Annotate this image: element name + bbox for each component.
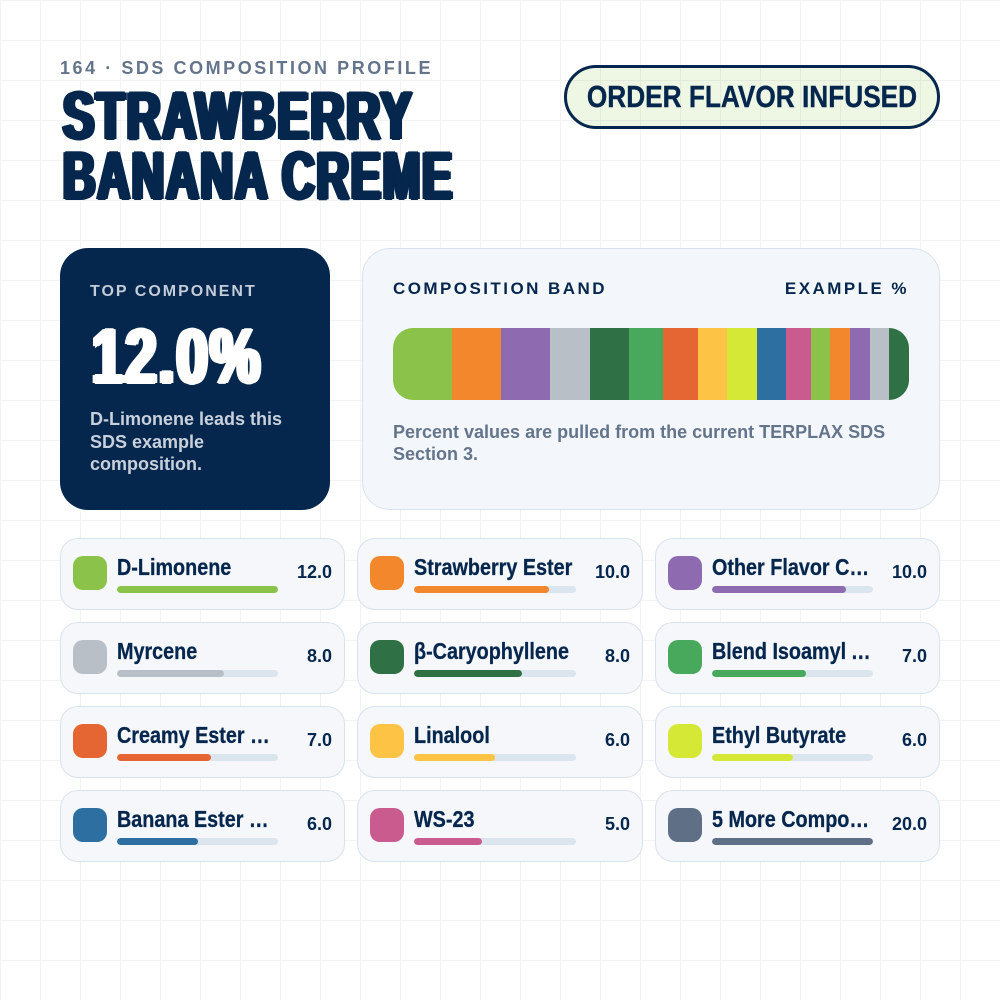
card: Strawberry Ester <box>357 538 643 610</box>
card: beta-Caryophyllene: 8.0 <box>605 646 630 666</box>
card: Banana Ester: 6.0 <box>307 814 332 834</box>
card: 5 More Components <box>655 790 940 862</box>
card: Myrcene: 8.0 <box>307 646 332 666</box>
note: Percent values are pulled from the current TERPLAX SDS <box>393 422 885 442</box>
card: Creamy Ester: 7.0 <box>307 730 332 750</box>
card: beta-Caryophyllene: β-Caryophyllene <box>414 638 569 664</box>
card: Ethyl Butyrate: Ethyl Butyrate <box>712 722 846 748</box>
card: Other Flavor: 10.0 <box>892 562 927 582</box>
card: Blend Isoamyl <box>655 622 940 694</box>
card: beta-Caryophyllene <box>357 622 643 694</box>
eyebrow: 164 · SDS COMPOSITION PROFILE <box>60 58 433 78</box>
card: Ethyl Butyrate <box>655 706 940 778</box>
card: D-Limonene <box>60 538 345 610</box>
badge: order flavor infused <box>564 65 940 129</box>
card: Blend Isoamyl: 7.0 <box>902 646 927 666</box>
caption <box>90 409 282 474</box>
big number: 12.0% <box>92 312 262 400</box>
panel: top component <box>60 248 330 510</box>
card: Linalool: 6.0 <box>605 730 630 750</box>
card: Myrcene: Myrcene <box>117 638 197 664</box>
heading: example percent: EXAMPLE % <box>785 279 909 298</box>
card: Strawberry Ester: Strawberry Ester <box>414 554 572 580</box>
badge: order flavor infused: ORDER FLAVOR INFUSED <box>587 79 917 114</box>
card: Linalool <box>357 706 643 778</box>
card: WS-23 <box>357 790 643 862</box>
card: Banana Ester <box>60 790 345 862</box>
title <box>62 78 454 214</box>
card: WS-23: WS-23 <box>414 806 474 832</box>
note <box>393 422 885 464</box>
heading: composition band: COMPOSITION BAND <box>393 279 607 298</box>
note: Section 3. <box>393 444 478 464</box>
label: top component: TOP COMPONENT <box>90 283 257 300</box>
card: D-Limonene: 12.0 <box>297 562 332 582</box>
panel: composition band <box>362 248 940 510</box>
card: D-Limonene: D-Limonene <box>117 554 231 580</box>
caption: SDS example <box>90 432 204 452</box>
caption: D-Limonene leads this <box>90 409 282 429</box>
title: BANANA CREME <box>63 138 454 214</box>
card: Linalool: Linalool <box>414 722 490 748</box>
card: Myrcene <box>60 622 345 694</box>
card: Other Flavor <box>655 538 940 610</box>
title: STRAWBERRY <box>63 78 414 154</box>
card: WS-23: 5.0 <box>605 814 630 834</box>
stacked composition band <box>393 328 909 400</box>
card: Ethyl Butyrate: 6.0 <box>902 730 927 750</box>
card: 5 More Components: 20.0 <box>892 814 927 834</box>
caption: composition. <box>90 454 202 474</box>
card: Strawberry Ester: 10.0 <box>595 562 630 582</box>
card: Creamy Ester <box>60 706 345 778</box>
